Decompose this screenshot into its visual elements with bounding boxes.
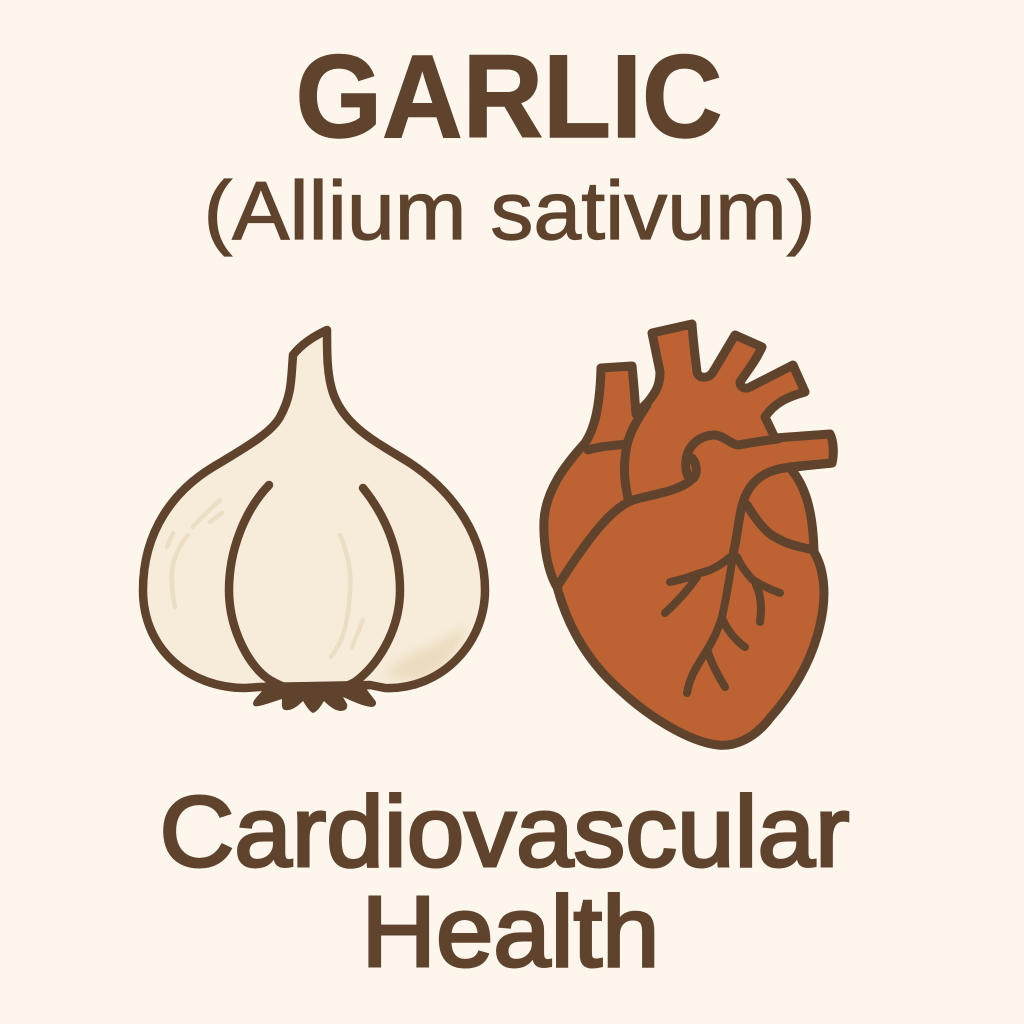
- roots: [253, 680, 376, 713]
- highlights: [167, 500, 363, 657]
- coronary vessels: [665, 555, 780, 693]
- clove lines: [229, 485, 400, 692]
- heading: health: Health: [362, 876, 660, 988]
- icon: garlic bulb: [143, 330, 485, 713]
- title: GARLIC: [296, 31, 722, 163]
- outline: [143, 330, 485, 688]
- icon: anatomical heart: [544, 324, 833, 745]
- shading: [385, 625, 466, 680]
- heading: cardiovascular: Cardiovascular: [160, 776, 850, 888]
- heart inner lines: [557, 405, 832, 587]
- subtitle: (Allium sativum): [204, 164, 816, 257]
